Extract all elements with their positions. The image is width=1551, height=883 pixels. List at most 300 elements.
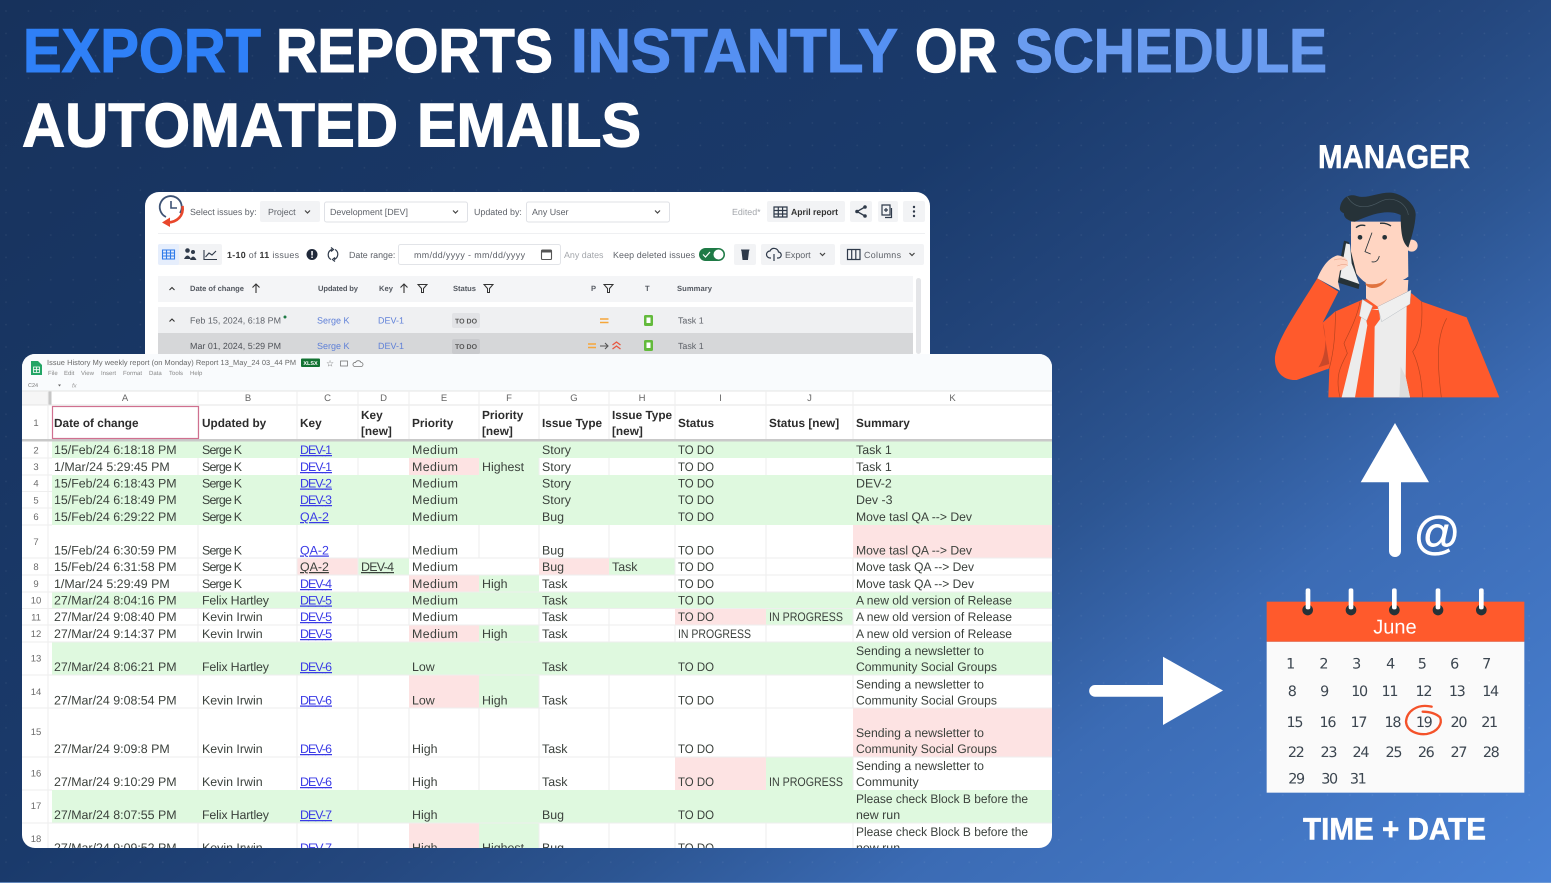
icon: clock logo: [160, 196, 183, 227]
dates: 8: [1288, 683, 1296, 700]
filter toolbar: Select issues by:: [190, 207, 257, 217]
table data rows: Kevin Irwin: [202, 694, 263, 708]
table data rows: Sending a newsletter to: [856, 726, 984, 740]
title: REPORTS: [276, 17, 553, 86]
row numbers: [32, 446, 41, 842]
title: OR: [915, 17, 997, 86]
table data rows: Story: [542, 443, 572, 457]
table data rows: Bug: [542, 544, 564, 558]
row numbers: 8: [33, 562, 39, 573]
dates: 17: [1351, 714, 1366, 731]
table data rows: Move tasl QA --> Dev: [856, 544, 973, 558]
dates: 12: [1416, 683, 1431, 700]
dates: 9: [1320, 683, 1328, 700]
spreadsheet app bar: Insert: [101, 370, 116, 377]
shirt shadow: [1399, 367, 1410, 397]
at sign: @: [1414, 507, 1460, 559]
spreadsheet app bar: fx: [72, 382, 78, 390]
table data rows: Story: [542, 493, 572, 507]
dates: 27: [1451, 744, 1466, 761]
title: AUTOMATED: [22, 92, 398, 160]
header row: Priority: [482, 408, 524, 422]
column headers: E: [441, 393, 447, 404]
table data rows: DEV-6: [300, 694, 332, 708]
table data rows: Felix Hartley: [202, 594, 270, 608]
table data rows: Bug: [542, 808, 564, 822]
table data rows: TO DO: [678, 493, 714, 507]
header row: [new]: [612, 424, 643, 438]
table data rows: DEV-3: [300, 493, 332, 507]
table data rows: High: [412, 742, 438, 756]
header row: Summary: [856, 416, 910, 430]
table data rows: DEV-4: [361, 560, 394, 574]
view toolbar: Export: [785, 250, 811, 260]
dates: 23: [1321, 744, 1336, 761]
cell highlights: [52, 441, 1052, 848]
issues table header: Key: [379, 284, 394, 293]
table data rows: Task: [542, 694, 568, 708]
row numbers: 7: [33, 537, 39, 548]
dates: 16: [1320, 714, 1336, 731]
table data rows: Task 1: [856, 443, 892, 457]
table data rows: 15/Feb/24 6:18:43 PM: [54, 476, 177, 490]
table data rows: Dev -3: [856, 493, 893, 507]
table data rows: IN PROGRESS: [678, 627, 751, 641]
table data rows: Kevin Irwin: [202, 775, 263, 789]
dates: 18: [1385, 714, 1401, 731]
table data rows: Serge K: [202, 560, 243, 574]
table data rows: Medium: [412, 577, 458, 591]
table data rows: DEV-5: [300, 627, 332, 641]
table data rows: Medium: [412, 476, 458, 490]
spreadsheet app bar: Help: [190, 370, 203, 377]
table data rows: Story: [542, 476, 572, 490]
table data rows: Serge K: [202, 476, 243, 490]
row numbers: 3: [33, 462, 39, 473]
view toolbar: mm/dd/yyyy - mm/dd/yyyy: [414, 250, 526, 260]
table data rows: Medium: [412, 627, 458, 641]
table data rows: IN PROGRESS: [769, 775, 843, 789]
panel: issue history app screenshot: [145, 192, 930, 354]
table data rows: DEV-1: [300, 443, 332, 457]
title: SCHEDULE: [1015, 17, 1327, 86]
table data rows: Medium: [412, 544, 458, 558]
table data rows: 15/Feb/24 6:29:22 PM: [54, 510, 177, 524]
table data rows: Highest: [482, 460, 525, 474]
dates: 4: [1386, 656, 1394, 672]
panel: exported spreadsheet: [22, 354, 1052, 855]
table data rows: Sending a newsletter to: [856, 644, 984, 658]
table data rows: Task: [542, 610, 568, 624]
table data rows: Medium: [412, 460, 458, 474]
dates: 31: [1350, 771, 1366, 787]
face: [1351, 222, 1408, 285]
view toolbar: Date range:: [349, 250, 395, 260]
issue row: Feb 15: [158, 307, 913, 333]
table data rows: Community Social Groups: [856, 660, 997, 674]
header row: Priority: [412, 416, 454, 430]
column headers: I: [719, 393, 722, 404]
row numbers: 9: [33, 579, 39, 590]
table data rows: Serge K: [202, 577, 243, 591]
table data rows: Serge K: [202, 544, 243, 558]
table data rows: Community: [856, 775, 919, 789]
dates: 1: [1286, 656, 1294, 672]
table data rows: TO DO: [678, 742, 714, 756]
title: INSTANTLY: [571, 17, 898, 86]
issue row: Mar 01: DEV-1: [378, 341, 404, 351]
issue row: Mar 01: Mar 01, 2024, 5:29 PM: [190, 341, 281, 351]
row numbers: 18: [31, 834, 41, 845]
binder rings: [1302, 588, 1487, 615]
table data rows: DEV-5: [300, 610, 332, 624]
table data rows: TO DO: [678, 660, 714, 674]
table data rows: 1/Mar/24 5:29:49 PM: [54, 577, 170, 591]
row numbers: 2: [33, 446, 39, 456]
header row: [new]: [482, 424, 513, 438]
spreadsheet app bar: View: [81, 370, 95, 377]
calendar header: [1267, 602, 1524, 642]
table data rows: Medium: [412, 560, 458, 574]
spreadsheet app bar: ☆: [326, 358, 334, 368]
table data rows: Task: [542, 775, 568, 789]
row numbers: 12: [31, 629, 41, 640]
table data rows: Low: [412, 660, 435, 674]
table data rows: Move task QA --> Dev: [856, 577, 975, 591]
spreadsheet app bar: Issue History My weekly report (on Monday) Report 13_May_24 03_44 PM: [47, 358, 296, 367]
table data rows: Serge K: [202, 493, 243, 507]
dates: 22: [1288, 744, 1304, 761]
table data rows: DEV-4: [300, 577, 332, 591]
table data rows: Task: [542, 742, 568, 756]
table data rows: Task: [542, 594, 568, 608]
label: manager: MANAGER: [1318, 138, 1470, 175]
table data rows: Task: [542, 577, 568, 591]
table data rows: Medium: [412, 493, 458, 507]
table data rows: Kevin Irwin: [202, 742, 263, 756]
table data rows: TO DO: [678, 610, 714, 624]
title: EMAILS: [417, 92, 641, 160]
filter toolbar: [190, 201, 925, 222]
table data rows: 27/Mar/24 9:09:52 PM: [54, 841, 177, 855]
column headers: A: [122, 393, 129, 404]
table data rows: QA-2: [300, 560, 329, 574]
spreadsheet app bar: Tools: [169, 370, 183, 377]
header row: Issue Type: [612, 408, 673, 422]
dates: 29: [1288, 771, 1304, 787]
issue row: Mar 01: Serge K: [317, 341, 350, 351]
spreadsheet app bar: C24: [28, 383, 38, 389]
table data rows: Kevin Irwin: [202, 841, 263, 855]
table data rows: 15/Feb/24 6:18:18 PM: [54, 443, 177, 457]
header row: Issue Type: [542, 416, 603, 430]
table data rows: A new old version of Release: [856, 594, 1012, 608]
table data rows: TO DO: [678, 694, 714, 708]
table data rows: Medium: [412, 610, 458, 624]
table data rows: TO DO: [678, 577, 714, 591]
dates: 26: [1418, 744, 1434, 761]
header row: Status: [678, 416, 714, 430]
table data rows: Story: [542, 460, 572, 474]
issue row: Mar 01: [158, 333, 913, 354]
view toolbar: Columns: [864, 250, 902, 260]
table data rows: Medium: [412, 510, 458, 524]
table data rows: Task: [612, 560, 638, 574]
dates: [1286, 656, 1499, 787]
issues table header: [158, 276, 913, 302]
table data rows: Please check Block B before the: [856, 792, 1028, 806]
shirt: [1342, 303, 1410, 397]
view toolbar: 1-10 of 11 issues: [227, 250, 300, 260]
table data rows: TO DO: [678, 443, 714, 457]
issues table header: Status: [453, 284, 476, 293]
label: time and date: TIME + DATE: [1303, 812, 1486, 846]
row numbers: 10: [31, 596, 41, 606]
spreadsheet app bar: File: [48, 370, 58, 377]
table data rows: 27/Mar/24 9:14:37 PM: [54, 627, 177, 641]
dates: 24: [1353, 744, 1369, 761]
row numbers: 6: [33, 512, 39, 523]
table data rows: DEV-6: [300, 775, 332, 789]
table data rows: Medium: [412, 443, 458, 457]
hand: [1317, 255, 1348, 291]
issue row: Mar 01: TO DO: [455, 344, 478, 351]
table data rows: TO DO: [678, 544, 714, 558]
table data rows: TO DO: [678, 560, 714, 574]
table data rows: Felix Hartley: [202, 660, 270, 674]
table data rows: TO DO: [678, 808, 714, 822]
table data rows: new run: [856, 808, 900, 822]
row numbers: 4: [33, 478, 39, 490]
table data rows: Task: [542, 627, 568, 641]
hair: [1340, 193, 1416, 248]
issue row: Feb 15: TO DO: [455, 318, 478, 326]
table data rows: Task: [542, 660, 568, 674]
table data rows: TO DO: [678, 775, 714, 789]
dates: 19: [1416, 714, 1432, 731]
table data rows: 27/Mar/24 8:06:21 PM: [54, 660, 177, 674]
header row: Status [new]: [769, 416, 839, 430]
table data rows: Felix Hartley: [202, 808, 270, 822]
column headers: C: [324, 393, 331, 404]
filter toolbar: Any User: [532, 207, 569, 217]
table data rows: Sending a newsletter to: [856, 678, 984, 692]
title: [22, 17, 1327, 160]
table data rows: QA-2: [300, 544, 329, 558]
eyes and brows: [1356, 223, 1391, 262]
dates: 13: [1449, 683, 1465, 700]
table data rows: 1/Mar/24 5:29:45 PM: [54, 460, 170, 474]
filter toolbar: Development [DEV]: [330, 207, 408, 217]
view toolbar: Keep deleted issues: [613, 250, 696, 260]
issues table header: T: [645, 284, 650, 293]
table data rows: QA-2: [300, 510, 329, 524]
table data rows: Move task QA --> Dev: [856, 560, 975, 574]
view toolbar: [158, 244, 924, 265]
table data rows: DEV-1: [300, 460, 332, 474]
table data rows: DEV-5: [300, 594, 332, 608]
column headers: H: [639, 393, 646, 404]
table data rows: DEV-7: [300, 841, 332, 855]
chin shadow: [1365, 278, 1387, 288]
row numbers: 13: [31, 654, 41, 664]
filter toolbar: Updated by:: [474, 207, 522, 217]
table data rows: Bug: [542, 510, 564, 524]
issues table header: P: [591, 284, 596, 293]
column headers: [22, 390, 1052, 406]
table data rows: Low: [412, 694, 435, 708]
header row: [22, 406, 1052, 442]
row numbers: 16: [31, 768, 41, 780]
tie: [1355, 310, 1380, 397]
header row: Key: [300, 416, 322, 430]
row numbers: 11: [31, 612, 41, 624]
table data rows: DEV-6: [300, 660, 332, 674]
month: June: [1373, 616, 1417, 638]
calendar body: [1267, 642, 1524, 793]
spreadsheet app bar: Data: [149, 370, 162, 377]
column headers: D: [380, 393, 387, 404]
dates: 5: [1418, 656, 1426, 672]
table data rows: 15/Feb/24 6:30:59 PM: [54, 544, 177, 558]
spreadsheet app bar: Format: [123, 370, 142, 377]
table data rows: DEV-6: [300, 742, 332, 756]
dates: 21: [1481, 714, 1497, 731]
table data rows: High: [412, 808, 438, 822]
table data rows: Please check Block B before the: [856, 825, 1028, 839]
table data rows: Medium: [412, 594, 458, 608]
grid lines: [22, 391, 1052, 848]
table data rows: Move tasl QA --> Dev: [856, 510, 973, 524]
dates: 2: [1319, 656, 1327, 672]
table data rows: High: [412, 841, 438, 855]
issues table header: Updated by: [318, 284, 359, 293]
header row: [new]: [361, 424, 392, 438]
spreadsheet app bar: Edit: [64, 370, 75, 377]
table data rows: High: [482, 627, 508, 641]
table data rows: Bug: [542, 841, 564, 855]
column headers: K: [949, 393, 956, 404]
row numbers: 17: [31, 801, 41, 812]
table data rows: DEV-2: [300, 476, 332, 490]
spreadsheet app bar: [22, 354, 1052, 391]
table data rows: Task 1: [856, 460, 892, 474]
filter toolbar: Project: [268, 207, 296, 217]
header row: Key: [361, 408, 383, 422]
dates: 25: [1386, 744, 1401, 761]
table data rows: 27/Mar/24 9:09:8 PM: [54, 742, 170, 756]
arrow: calendar to manager: [1361, 423, 1429, 557]
table data rows: DEV-7: [300, 808, 332, 822]
collar: [1359, 290, 1411, 322]
column headers: B: [245, 393, 251, 404]
table data rows: 27/Mar/24 9:08:54 PM: [54, 694, 177, 708]
arrow: spreadsheet to calendar: [1089, 657, 1223, 725]
table data rows: 27/Mar/24 8:07:55 PM: [54, 808, 177, 822]
table data rows: DEV-2: [856, 476, 892, 490]
table data rows: High: [482, 694, 508, 708]
table data rows: TO DO: [678, 841, 714, 855]
table data rows: High: [412, 775, 438, 789]
table data rows: Kevin Irwin: [202, 627, 263, 641]
header row: Updated by: [202, 416, 267, 430]
table data rows: TO DO: [678, 510, 714, 524]
table data rows: 15/Feb/24 6:18:49 PM: [54, 493, 177, 507]
dates: 6: [1450, 656, 1458, 672]
table data rows: [54, 443, 1028, 855]
table data rows: 27/Mar/24 8:04:16 PM: [54, 594, 177, 608]
dates: 30: [1321, 771, 1337, 787]
table data rows: Community Social Groups: [856, 742, 997, 756]
table data rows: A new old version of Release: [856, 610, 1012, 624]
title: EXPORT: [23, 17, 261, 86]
dates: 28: [1483, 744, 1499, 761]
table data rows: 15/Feb/24 6:31:58 PM: [54, 560, 177, 574]
icon: calendar: [1267, 588, 1524, 793]
table data rows: 27/Mar/24 9:10:29 PM: [54, 775, 177, 789]
dates: 11: [1382, 683, 1397, 700]
ear: [1406, 240, 1418, 252]
view toolbar: Any dates: [564, 250, 604, 260]
icon: manager on the phone: [1275, 193, 1499, 397]
issue row: Feb 15: Serge K: [317, 316, 350, 326]
table data rows: Serge K: [202, 460, 243, 474]
table data rows: 27/Mar/24 9:08:40 PM: [54, 610, 177, 624]
issues table header: Date of change: [190, 284, 244, 293]
spreadsheet app bar: XLSX: [303, 361, 318, 367]
dates: 20: [1451, 714, 1467, 731]
header row: Date of change: [54, 416, 139, 430]
row numbers: 14: [31, 687, 41, 698]
dates: 7: [1482, 656, 1490, 672]
column headers: F: [506, 393, 512, 404]
table data rows: High: [482, 577, 508, 591]
table data rows: IN PROGRESS: [769, 610, 843, 624]
issue row: Feb 15: DEV-1: [378, 316, 404, 326]
issue row: Mar 01: Task 1: [678, 341, 704, 351]
table data rows: Kevin Irwin: [202, 610, 263, 624]
table data rows: TO DO: [678, 460, 714, 474]
table data rows: Community Social Groups: [856, 694, 997, 708]
column headers: G: [570, 393, 578, 404]
table data rows: Serge K: [202, 510, 243, 524]
phone: [1337, 241, 1359, 289]
table data rows: A new old version of Release: [856, 627, 1012, 641]
row numbers: 15: [31, 727, 41, 738]
table data rows: Highest: [482, 841, 525, 855]
jacket details: [1318, 323, 1329, 367]
dates: 15: [1287, 714, 1302, 731]
table data rows: Bug: [542, 560, 564, 574]
dates: 14: [1482, 683, 1498, 700]
table data rows: Serge K: [202, 443, 243, 457]
table data rows: Sending a newsletter to: [856, 759, 984, 773]
issue row: Feb 15: Feb 15, 2024, 6:18 PM: [190, 316, 281, 326]
column headers: J: [807, 393, 812, 404]
header row: 1: [33, 418, 39, 429]
row numbers: 5: [33, 496, 39, 506]
issue row: Feb 15: Task 1: [678, 316, 704, 326]
table data rows: new run: [856, 841, 900, 855]
table data rows: TO DO: [678, 476, 714, 490]
jacket: [1275, 278, 1499, 397]
filter toolbar: April report: [791, 207, 838, 217]
issues table header: Summary: [677, 284, 713, 293]
hand-drawn circle on 19: [1406, 706, 1441, 734]
neck: [1366, 280, 1408, 307]
dates: 3: [1352, 656, 1360, 672]
filter toolbar: Edited*: [732, 207, 761, 217]
